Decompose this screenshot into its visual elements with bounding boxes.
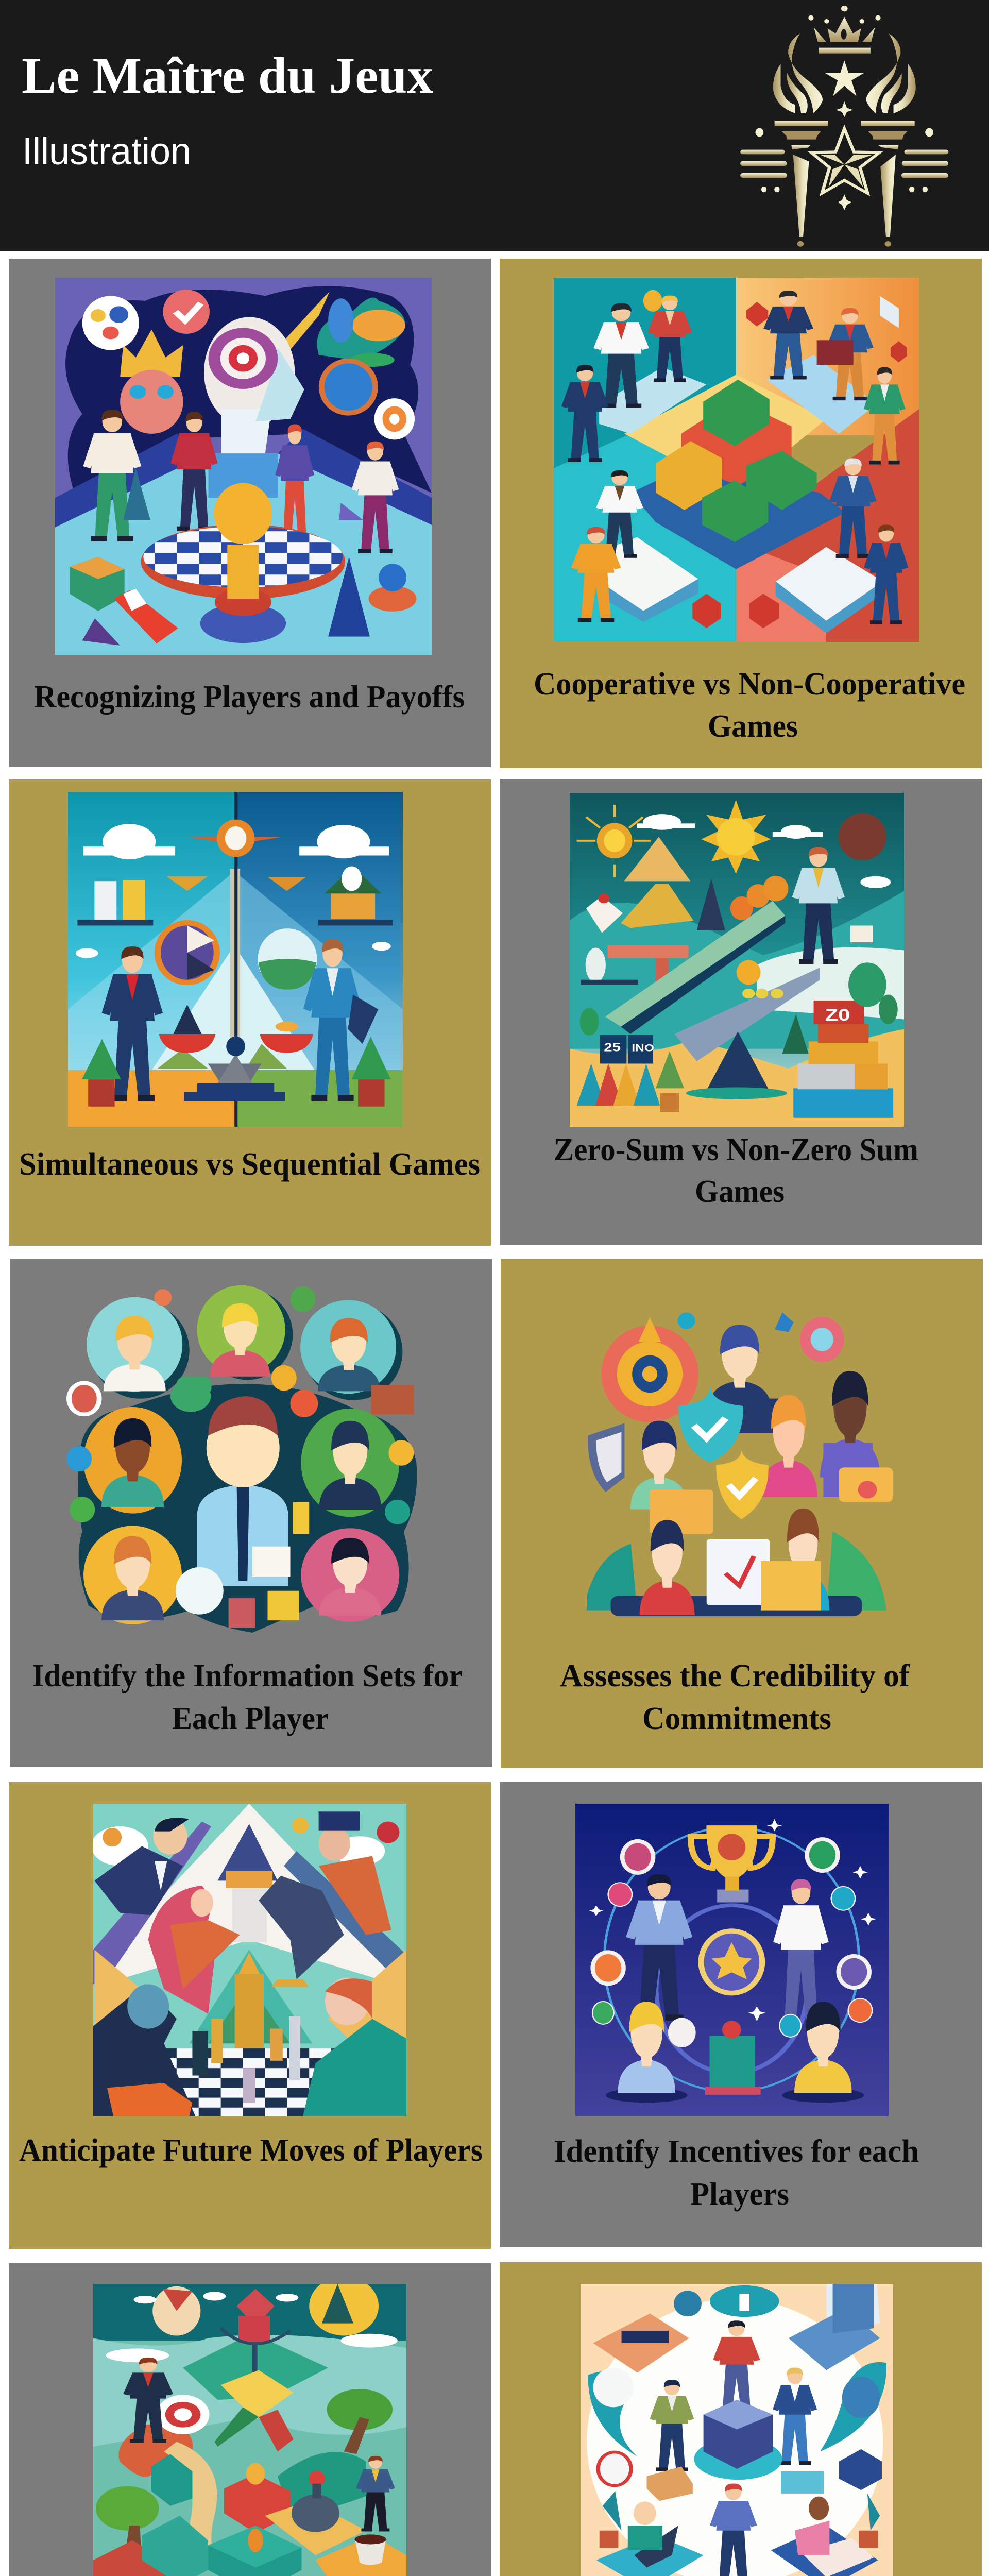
panel background (500, 259, 982, 768)
heading: Zero-Sum vs Non-Zero Sum (554, 1132, 918, 1167)
illustration: connected people on platforms (581, 2284, 893, 2576)
illustration: seesaw and pyramids landscape (570, 793, 904, 1127)
title: Le Maître du Jeux (22, 47, 433, 104)
heading: Identify the Information Sets for (32, 1658, 463, 1693)
panel: Identify the Information Sets for Each Player (10, 1259, 492, 1767)
illustration: isometric business game board (554, 278, 919, 642)
panel: Cooperative vs Non-Cooperative Games (500, 259, 982, 768)
illustration: seesaw and pyramids landscape: Z0 (825, 1006, 850, 1024)
panel background (9, 1782, 491, 2249)
heading: Identify Incentives for each (554, 2134, 919, 2169)
panel background (9, 2263, 491, 2576)
illustration: seesaw and pyramids landscape: INO (632, 1042, 654, 1054)
heading: Commitments (642, 1701, 831, 1736)
heading: Cooperative vs Non-Cooperative (534, 667, 965, 702)
heading: Games (708, 709, 798, 744)
illustration: players around a chess board (55, 278, 432, 655)
panel: Assesses the Credibility of Commitments (501, 1259, 983, 1768)
heading (554, 1132, 918, 1209)
panel background (9, 779, 491, 1246)
heading (32, 1658, 463, 1736)
illustration: scales between two businessmen (68, 792, 403, 1127)
illustration: trophy and player incentive circle (575, 1804, 889, 2116)
header band (0, 0, 989, 251)
illustration: chess players under a triangle (93, 1804, 406, 2116)
heading (554, 2134, 919, 2212)
heading: Players (690, 2177, 789, 2212)
illustration: team with shields (587, 1312, 893, 1617)
heading (534, 667, 965, 744)
heading: Assesses the Credibility of (560, 1658, 910, 1693)
heading (560, 1658, 910, 1736)
heading: Recognizing Players and Payoffs (34, 680, 465, 715)
panel: Identify Incentives for each Players (500, 1782, 982, 2247)
panel: Extract Strategies for Each Player (9, 2263, 491, 2576)
heading: Simultaneous vs Sequential Games (19, 1147, 480, 1182)
panel: Zero-Sum vs Non-Zero Sum Games (500, 779, 982, 1245)
panel: Anticipate Future Moves of Players (9, 1782, 491, 2249)
panel background (500, 2262, 982, 2576)
panel background (10, 1259, 492, 1767)
illustration: seesaw and pyramids landscape: 25 (604, 1041, 621, 1054)
panel: Simultaneous vs Sequential Games (9, 779, 491, 1246)
panel: Recognizing Players and Payoffs (9, 259, 491, 767)
icon: gold torch and star emblem (740, 6, 949, 247)
panel background (9, 259, 491, 767)
panel background (500, 779, 982, 1245)
illustration: network of player portraits (66, 1285, 417, 1633)
illustration: isometric strategy landscape (93, 2284, 406, 2576)
heading: Each Player (172, 1701, 329, 1736)
subtitle: Illustration (22, 130, 191, 173)
panel: Pairing Strategies Across Players (500, 2262, 982, 2576)
heading: Games (695, 1174, 785, 1209)
panel background (500, 1782, 982, 2247)
panel background (501, 1259, 983, 1768)
heading: Anticipate Future Moves of Players (19, 2133, 483, 2168)
